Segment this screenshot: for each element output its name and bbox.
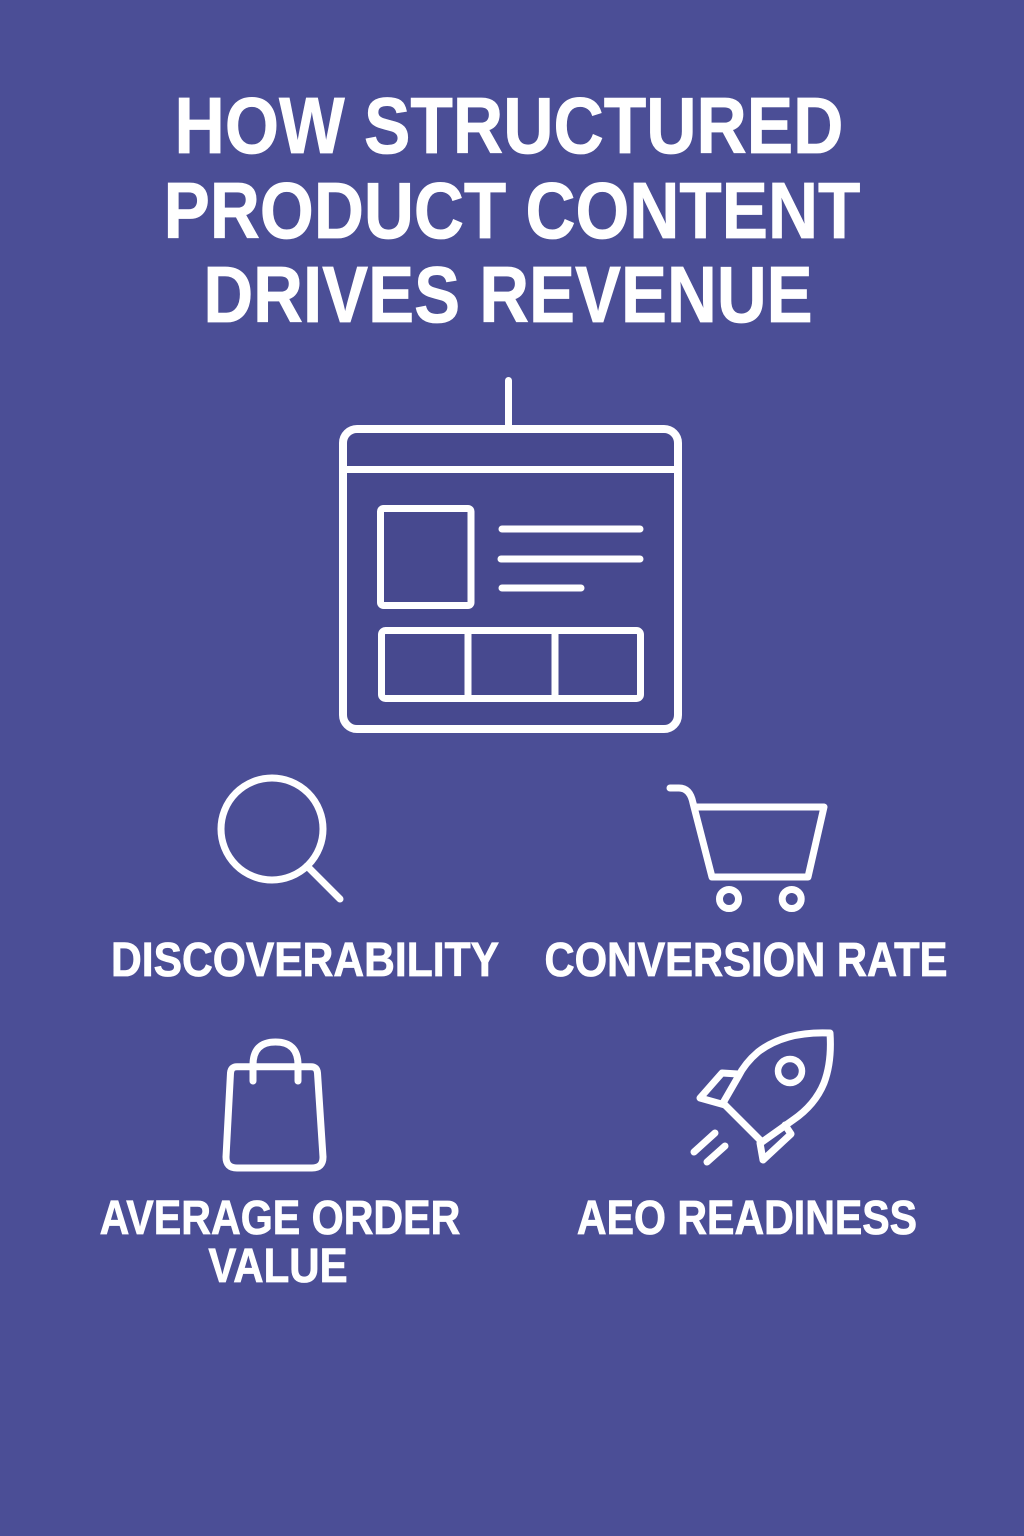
label: average order value: AVERAGE ORDER [99, 1192, 460, 1245]
label: average order value [99, 1192, 460, 1293]
title: HOW STRUCTURED [174, 81, 843, 170]
label: AEO readiness: AEO READINESS [577, 1192, 917, 1245]
title: DRIVES REVENUE [203, 250, 812, 339]
title: PRODUCT CONTENT [163, 166, 860, 255]
label: conversion rate: CONVERSION RATE [544, 934, 947, 987]
title [163, 81, 860, 339]
label: average order value: VALUE [208, 1240, 347, 1293]
label: discoverability: DISCOVERABILITY [111, 934, 499, 987]
